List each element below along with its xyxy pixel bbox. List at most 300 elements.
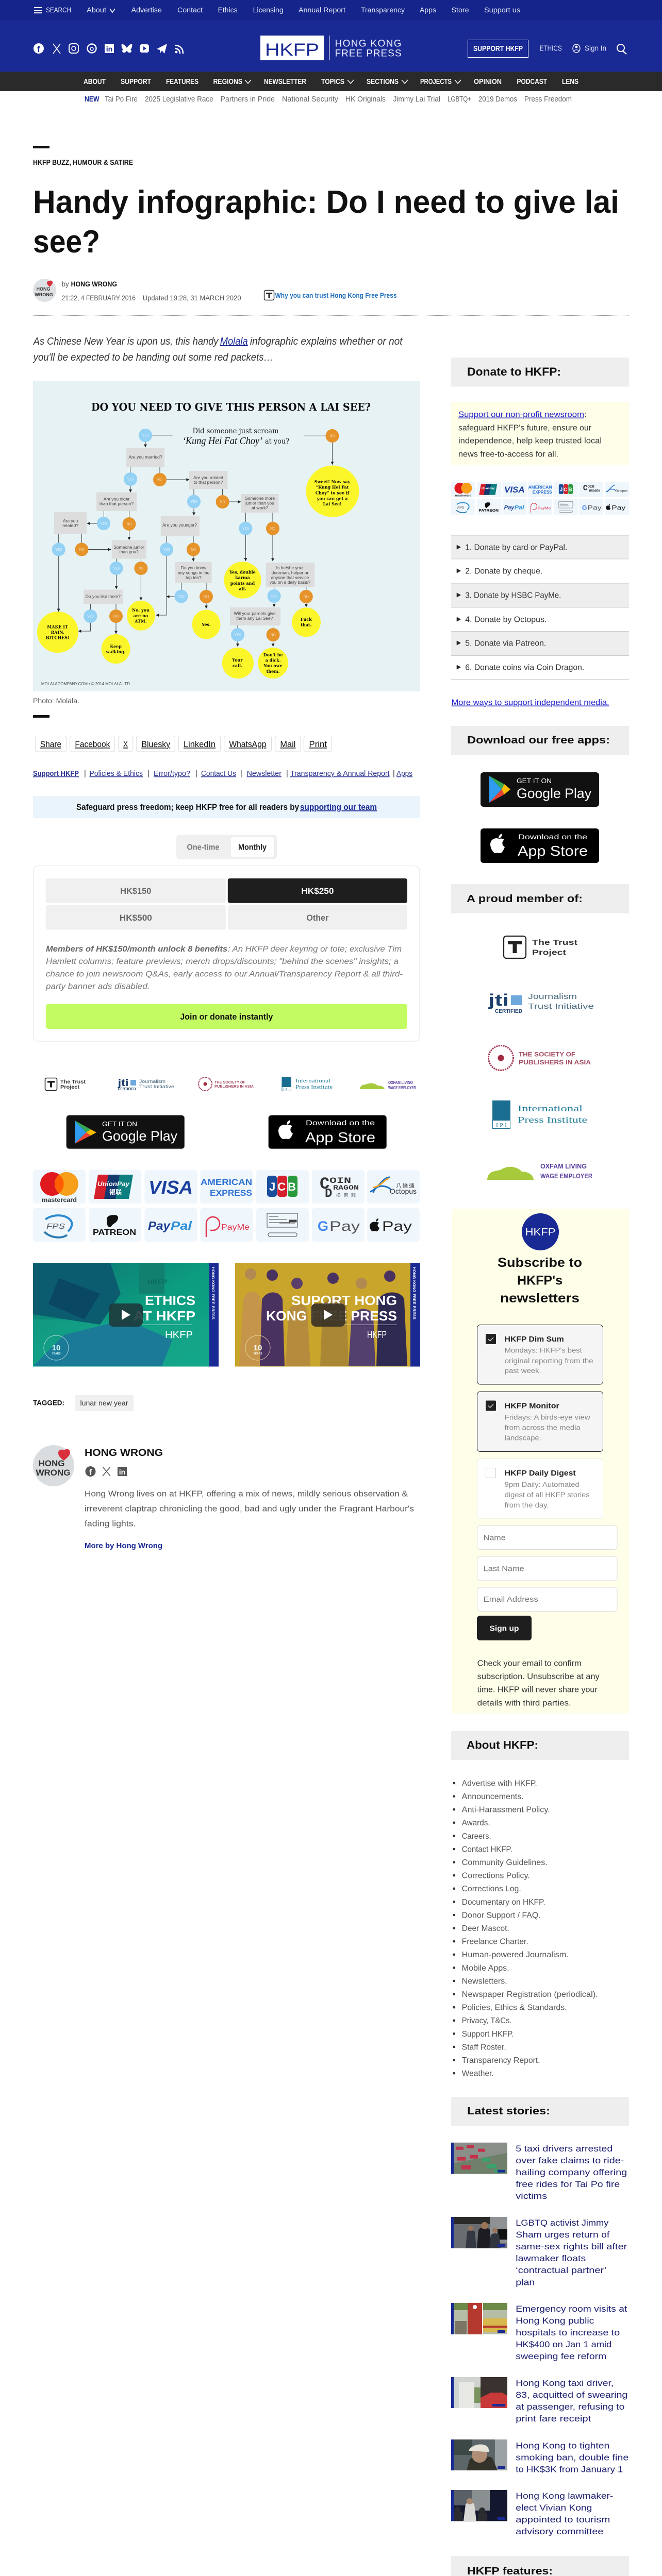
fps bbox=[44, 1215, 72, 1238]
one-time monthly toggle bbox=[176, 835, 277, 859]
american express bbox=[201, 1177, 252, 1198]
logo: jti bbox=[488, 991, 594, 1014]
amount options bbox=[46, 878, 407, 929]
yes and no nodes: YES bbox=[234, 633, 241, 637]
question boxes: than you? bbox=[119, 549, 139, 554]
patreon bbox=[93, 1215, 136, 1237]
yellow answer bubbles: BITCHES! bbox=[46, 635, 70, 640]
option: monitor: HKFP Monitor bbox=[505, 1402, 559, 1411]
story 4: at passenger, refusing to bbox=[516, 2402, 624, 2412]
question boxes: Is he/she your bbox=[276, 565, 304, 570]
signup note: Check your email to confirm bbox=[477, 1659, 582, 1668]
tags: TAGGED: bbox=[33, 1398, 64, 1406]
small payment grid: OIN bbox=[588, 485, 594, 489]
question boxes: related? bbox=[62, 523, 78, 528]
main navigation: SUPPORT bbox=[121, 78, 151, 86]
video: ethics at hkfp: AT HKFP bbox=[134, 1308, 195, 1324]
story 1: free rides for Tai Po fire bbox=[516, 2179, 620, 2189]
top utility bar: Transparency bbox=[361, 6, 405, 14]
story 2: Sham urges return of bbox=[516, 2230, 610, 2240]
logo: trust project: The Trust bbox=[532, 938, 577, 947]
policy links: Error/typo? bbox=[154, 770, 190, 778]
author box: irreverent claptrap chronicling the good, bad and ugly under the Fragrant Harbour's bbox=[85, 1504, 414, 1514]
trending links: Press Freedom bbox=[524, 95, 572, 104]
opening question bbox=[183, 427, 289, 447]
top utility bar: Store bbox=[452, 6, 469, 14]
icon: search bbox=[617, 44, 626, 54]
payment methods grid bbox=[33, 1170, 420, 1242]
icon: hamburger menu bbox=[34, 8, 42, 13]
trending links: 2019 Demos bbox=[478, 95, 517, 104]
yellow answer bubbles: No, you bbox=[132, 607, 150, 613]
video: ethics at hkfp: HONG KONG FREE PRESS bbox=[211, 1267, 216, 1319]
trending links: National Security bbox=[282, 95, 339, 104]
share buttons: Mail bbox=[280, 740, 295, 749]
main navigation: PROJECTS bbox=[420, 78, 452, 86]
about links list: Anti-Harassment Policy. bbox=[462, 1806, 550, 1815]
app store badge: Download on the bbox=[306, 1119, 375, 1127]
yellow answer bubbles: ATM. bbox=[134, 619, 147, 624]
story 4: 83, acquitted of swearing bbox=[516, 2390, 627, 2400]
trending links: HK Originals bbox=[345, 95, 386, 104]
about links list: Donor Support / FAQ. bbox=[462, 1911, 541, 1920]
story 6: appointed to tourism bbox=[516, 2515, 610, 2524]
about links list: Contact HKFP. bbox=[462, 1845, 512, 1854]
trending links: 2025 Legislative Race bbox=[145, 95, 213, 104]
about links list: Corrections Log. bbox=[462, 1885, 521, 1893]
logo: society of publishers in asia: THE SOCIETY OF bbox=[214, 1080, 245, 1084]
author social icons bbox=[86, 1466, 127, 1477]
about links list: Human-powered Journalism. bbox=[462, 1951, 569, 1959]
option: daily digest bbox=[477, 1459, 603, 1518]
logo: trust project bbox=[504, 936, 577, 958]
logo: jti: Journalism bbox=[528, 992, 577, 1001]
connector arrows bbox=[59, 435, 332, 647]
question boxes: Are you bbox=[63, 518, 78, 523]
small payment grid: Pay bbox=[504, 504, 515, 511]
option: daily digest: digest of all HKFP stories bbox=[505, 1491, 590, 1499]
signup heading: newsletters bbox=[500, 1291, 580, 1306]
logo: jti: CERTIFIED bbox=[495, 1008, 522, 1014]
policy links: Contact Us bbox=[201, 770, 236, 778]
sidebar: latest stories: Latest stories: bbox=[467, 2106, 550, 2117]
trending links: LGBTQ+ bbox=[448, 95, 471, 104]
policy links: Policies & Ethics bbox=[90, 770, 143, 778]
yes and no nodes: YES bbox=[100, 521, 107, 526]
small payment grid: AMERICAN bbox=[528, 485, 552, 489]
about links list: Advertise with HKFP. bbox=[462, 1780, 537, 1788]
question boxes: them any Lai See? bbox=[237, 616, 273, 621]
question boxes: Do you like them? bbox=[86, 594, 121, 599]
about links list: Awards. bbox=[462, 1819, 490, 1827]
policy links: Newsletter bbox=[247, 770, 282, 778]
author avatar: HONG bbox=[36, 286, 51, 292]
masthead: ETHICS bbox=[540, 44, 562, 53]
about links list: Corrections Policy. bbox=[462, 1872, 530, 1880]
about links list: Policies, Ethics & Standards. bbox=[462, 2004, 567, 2012]
signup heading: Subscribe to bbox=[498, 1256, 582, 1270]
sidebar: download apps: Download our free apps: bbox=[467, 735, 610, 746]
logo: international press institute bbox=[282, 1077, 333, 1091]
share buttons: X bbox=[123, 740, 128, 749]
top utility bar: Annual Report bbox=[299, 6, 345, 14]
social icons: f bbox=[37, 44, 40, 54]
yellow answer bubbles: all. bbox=[239, 586, 246, 591]
small payment grid: VISA bbox=[504, 485, 525, 495]
yes and no nodes: YES bbox=[142, 434, 149, 438]
visa: VISA bbox=[148, 1177, 193, 1198]
logo: society of publishers in asia bbox=[489, 1046, 591, 1071]
yellow answer bubbles: Yes, double bbox=[229, 570, 256, 575]
cheque bbox=[267, 1213, 297, 1236]
intro paragraph: infographic explains whether or not bbox=[250, 336, 403, 347]
story 2: LGBTQ activist Jimmy bbox=[516, 2218, 609, 2228]
sign up button: Sign up bbox=[490, 1624, 519, 1633]
logo: international press institute: I·P·I bbox=[496, 1122, 507, 1128]
story 4: Hong Kong taxi driver, bbox=[516, 2378, 614, 2388]
paypal: Pay bbox=[148, 1219, 171, 1232]
google pay: Pay bbox=[329, 1218, 360, 1234]
logo: jti: Trust Initiative bbox=[139, 1084, 174, 1090]
video: support hong kong free press: SUPORT HONG bbox=[291, 1293, 397, 1308]
option: dim sum: HKFP Dim Sum bbox=[505, 1335, 564, 1344]
story 4 bbox=[451, 2377, 627, 2424]
yes and no nodes: NO bbox=[79, 548, 85, 552]
masthead bbox=[0, 20, 662, 72]
logo: jti: jti bbox=[488, 991, 509, 1009]
trust project link: Why you can trust Hong Kong Free Press bbox=[275, 291, 397, 299]
press freedom banner: supporting our team bbox=[300, 803, 377, 812]
small payment grid: JCB bbox=[560, 487, 572, 493]
payme bbox=[206, 1217, 250, 1237]
main navigation: FEATURES bbox=[166, 78, 198, 86]
about links list: Deer Mascot. bbox=[462, 1924, 509, 1933]
about links list: Announcements. bbox=[462, 1792, 524, 1801]
trending links: Tai Po Fire bbox=[105, 95, 138, 104]
google play badge small bbox=[481, 772, 599, 807]
signup note: time. HKFP will never share your bbox=[477, 1686, 598, 1694]
question boxes: to that person? bbox=[194, 480, 223, 485]
top utility bar: Support us bbox=[484, 6, 520, 14]
member benefits: Hamlett columns; feature previews; merch drops/discounts; "behind the scenes" insights; a bbox=[46, 957, 399, 966]
question boxes bbox=[54, 448, 315, 625]
yellow answer bubbles: points and bbox=[230, 581, 255, 586]
top utility bar: Licensing bbox=[253, 6, 284, 14]
video: support hong kong free press: HONG KONG FREE PRESS bbox=[412, 1267, 417, 1319]
story 5: Hong Kong to tighten bbox=[516, 2441, 609, 2451]
sidebar: download apps bbox=[451, 726, 629, 863]
yes and no nodes: YES bbox=[113, 567, 120, 571]
question boxes: Are you younger? bbox=[162, 522, 197, 528]
donate accordion: 1. Donate by card or PayPal. bbox=[465, 543, 567, 552]
story 1: 5 taxi drivers arrested bbox=[516, 2144, 613, 2154]
story 3: sweeping fee reform bbox=[516, 2351, 606, 2361]
small payment grid: mastercard bbox=[455, 495, 471, 498]
coin dragon: C bbox=[320, 1175, 329, 1194]
policy links: | bbox=[147, 770, 150, 778]
question boxes: doorman, helper or bbox=[271, 570, 308, 575]
main navigation bbox=[0, 72, 662, 91]
policy links: Support HKFP bbox=[33, 770, 79, 778]
main navigation: LENS bbox=[562, 78, 578, 86]
small payment grid: PayMe bbox=[538, 505, 551, 510]
yellow answer bubbles: “Kung Hei Fat bbox=[316, 485, 349, 490]
logo: trust project bbox=[45, 1078, 86, 1090]
story 3: HK$400 on Jan 1 amid bbox=[516, 2340, 611, 2349]
yes and no nodes: YES bbox=[55, 548, 62, 552]
signup note: subscription. Unsubscribe at any bbox=[477, 1672, 600, 1681]
payment tiles bbox=[33, 1170, 420, 1242]
yellow answer bubbles: karma bbox=[235, 575, 250, 580]
yellow answer bubbles: Don't be bbox=[263, 652, 283, 657]
donate accordion: 3. Donate by HSBC PayMe. bbox=[465, 591, 561, 600]
photo caption: Photo: Molala. bbox=[33, 697, 79, 705]
option: dim sum bbox=[477, 1325, 603, 1384]
video: support hong kong free press: KONG FREE PRESS bbox=[266, 1308, 397, 1324]
small payment grid: UnionPay bbox=[482, 487, 495, 490]
author photo: HONG bbox=[38, 1459, 65, 1468]
infographic flowchart bbox=[33, 381, 420, 691]
patreon: PATREON bbox=[93, 1228, 136, 1237]
small payment grid: PATREON bbox=[478, 508, 499, 513]
membership logos row bbox=[45, 1077, 416, 1091]
about links list: Community Guidelines. bbox=[462, 1858, 548, 1867]
HKFP logo: HKFP bbox=[265, 40, 319, 60]
top utility bar: About bbox=[87, 6, 106, 14]
flowchart title: DO YOU NEED TO GIVE THIS PERSON A LAI SEE? bbox=[91, 401, 371, 413]
question boxes: Will your parents give bbox=[234, 611, 276, 616]
about links list: Mobile Apps. bbox=[462, 1964, 509, 1973]
author box: HONG WRONG bbox=[85, 1448, 163, 1459]
yes and no nodes: NO bbox=[270, 527, 275, 531]
member benefits: party banner ads disabled. bbox=[45, 982, 150, 991]
story 1: hailing company offering bbox=[516, 2167, 627, 2177]
yes and no nodes: NO bbox=[126, 522, 132, 527]
yes and no nodes: YES bbox=[271, 595, 277, 599]
video: support hong kong free press: HKFP bbox=[367, 1330, 387, 1341]
octopus: Octopus bbox=[390, 1187, 417, 1195]
yes and no nodes: NO bbox=[157, 478, 162, 482]
story 5 bbox=[451, 2439, 628, 2475]
HKFP logo bbox=[260, 36, 401, 60]
video: ethics at hkfp: HKFP bbox=[147, 1278, 167, 1286]
byline: Updated 19:28, 31 MARCH 2020 bbox=[143, 294, 241, 302]
policy links: | bbox=[195, 770, 197, 778]
title bbox=[33, 184, 619, 260]
yes and no nodes: NO bbox=[113, 614, 119, 618]
yes and no nodes: YES bbox=[242, 527, 249, 531]
small payment grid: C bbox=[583, 485, 588, 493]
amount options: Other bbox=[306, 913, 329, 923]
yes and no nodes: YES bbox=[178, 595, 185, 599]
author box: fading lights. bbox=[85, 1520, 136, 1528]
share buttons: Share bbox=[40, 740, 61, 749]
byline: by bbox=[62, 280, 69, 288]
trust project link bbox=[264, 291, 397, 300]
yellow answer bubbles: them. bbox=[267, 669, 280, 674]
member benefits: Members of HK$150/month unlock 8 benefits bbox=[46, 945, 227, 954]
top utility bar bbox=[0, 0, 662, 20]
option: dim sum: original reporting from the bbox=[505, 1357, 593, 1365]
main navigation: SECTIONS bbox=[367, 78, 399, 86]
main navigation: ABOUT bbox=[84, 78, 106, 86]
yellow answer bubbles: Sweet! Now say bbox=[315, 479, 351, 484]
trending links bbox=[85, 95, 572, 104]
donate accordion: 2. Donate by cheque. bbox=[465, 567, 542, 576]
apple pay bbox=[370, 1218, 412, 1234]
logo: oxfam living wage bbox=[360, 1080, 416, 1090]
option: daily digest: HKFP Daily Digest bbox=[505, 1469, 576, 1478]
HKFP round logo bbox=[522, 1213, 559, 1250]
logo: international press institute: Press Institute bbox=[518, 1115, 587, 1125]
yellow answer bubbles: Fuck bbox=[301, 617, 312, 622]
yes and no nodes: YES bbox=[190, 500, 197, 504]
author box: Hong Wrong lives on at HKFP, offering a mix of news, mildly serious observation & bbox=[85, 1490, 408, 1498]
donate accordion: 5. Donate via Patreon. bbox=[465, 639, 546, 648]
story 2 bbox=[451, 2217, 627, 2287]
about links list: Staff Roster. bbox=[462, 2043, 506, 2052]
small payment grid: FPS bbox=[457, 506, 465, 510]
input fields bbox=[477, 1526, 617, 1612]
jcb bbox=[267, 1176, 297, 1197]
logo: oxfam living wage: OXFAM LIVING bbox=[388, 1080, 413, 1085]
logo: international press institute: International bbox=[518, 1104, 583, 1113]
logo: international press institute: International bbox=[295, 1078, 330, 1084]
icon: sign in bbox=[573, 44, 580, 53]
sidebar: about bbox=[451, 1731, 629, 2078]
opening question: Did someone just scream bbox=[193, 427, 278, 435]
question boxes: Someone more bbox=[245, 496, 275, 501]
yellow answer bubbles: are no bbox=[134, 613, 148, 618]
story 3 bbox=[451, 2303, 627, 2361]
yellow answer bubbles: walking. bbox=[106, 649, 126, 654]
google play badge: Google Play bbox=[102, 1128, 177, 1144]
story 3: Hong Kong public bbox=[516, 2316, 594, 2326]
sidebar: donate: More ways to support independent media. bbox=[452, 699, 609, 707]
google pay bbox=[318, 1218, 360, 1234]
donate note bbox=[451, 402, 629, 465]
yes and no nodes: NO bbox=[220, 500, 225, 504]
social icons bbox=[34, 43, 183, 54]
donate note: news free-to-access for all. bbox=[458, 450, 558, 459]
signup heading: HKFP's bbox=[517, 1274, 562, 1288]
question boxes: Someone junior bbox=[113, 545, 144, 550]
amount options: HK$150 bbox=[120, 886, 151, 896]
sidebar: proud member: A proud member of: bbox=[467, 893, 583, 905]
jcb: JCB bbox=[269, 1180, 296, 1193]
share buttons: Facebook bbox=[75, 740, 110, 749]
unionpay: 银联 bbox=[109, 1188, 122, 1196]
question boxes: any songs in the bbox=[177, 570, 210, 575]
video: ethics at hkfp: YEARS bbox=[52, 1352, 61, 1355]
author social icons: f bbox=[89, 1468, 92, 1477]
small payment grid: Pay bbox=[588, 504, 602, 511]
video: ethics at hkfp bbox=[33, 1263, 219, 1366]
app store badge small: Download on the bbox=[518, 833, 587, 841]
yellow answer bubbles: Your bbox=[231, 657, 243, 663]
coin dragon: 換幣龍 bbox=[336, 1192, 356, 1198]
payme: PayMe bbox=[221, 1223, 250, 1232]
input fields: Last Name bbox=[484, 1564, 524, 1573]
author box bbox=[33, 1445, 414, 1550]
top utility bar: Ethics bbox=[218, 6, 238, 14]
paypal bbox=[148, 1219, 192, 1232]
story 5: to HK$3K from January 1 bbox=[516, 2465, 623, 2475]
yes and no nodes: YES bbox=[87, 614, 94, 618]
about links list: Freelance Charter. bbox=[462, 1938, 528, 1946]
yes and no nodes bbox=[52, 429, 339, 641]
sidebar: about: About HKFP: bbox=[467, 1738, 538, 1752]
option: monitor: Fridays: A birds-eye view bbox=[505, 1414, 590, 1421]
donation card bbox=[33, 866, 420, 1041]
question boxes: Are you older bbox=[104, 497, 129, 502]
logo: society of publishers in asia: PUBLISHERS IN ASIA bbox=[214, 1084, 254, 1089]
yellow answer bubbles: You owe bbox=[263, 663, 283, 668]
question boxes: junior than you bbox=[245, 501, 274, 506]
story 1 bbox=[451, 2143, 627, 2201]
main navigation: TOPICS bbox=[321, 78, 344, 86]
option: monitor: landscape. bbox=[505, 1434, 541, 1442]
yellow answer bubbles: Keep bbox=[110, 643, 122, 649]
sidebar: proud member bbox=[451, 884, 629, 1180]
trending links: Partners in Pride bbox=[221, 95, 275, 104]
video: ethics at hkfp: ETHICS bbox=[145, 1293, 195, 1308]
small payment grid: Pay bbox=[611, 504, 626, 511]
amount options: HK$250 bbox=[301, 886, 334, 896]
join button bbox=[46, 1004, 407, 1029]
option: monitor: from across the media bbox=[505, 1424, 581, 1431]
story 6: advisory committee bbox=[516, 2527, 603, 2536]
question boxes: at work? bbox=[252, 505, 268, 510]
intro paragraph: Molala bbox=[220, 336, 248, 347]
google play badge small: Google Play bbox=[517, 786, 591, 801]
about links list: Support HKFP. bbox=[462, 2030, 514, 2039]
author box: More by Hong Wrong bbox=[85, 1542, 162, 1550]
donate note: Support our non-profit newsroom bbox=[458, 410, 584, 419]
logo: oxfam living wage: OXFAM LIVING bbox=[540, 1162, 587, 1170]
member benefits bbox=[45, 945, 403, 991]
small payment grid: DRAGON bbox=[589, 489, 601, 493]
press freedom banner: Safeguard press freedom; keep HKFP free for all readers by bbox=[76, 803, 300, 812]
yes and no nodes: YES bbox=[163, 548, 170, 552]
american express: AMERICAN bbox=[201, 1177, 252, 1187]
about links list: Transparency Report. bbox=[462, 2056, 540, 2065]
app store badge: App Store bbox=[305, 1129, 375, 1145]
question boxes: Are you related bbox=[193, 475, 223, 480]
story 6: Hong Kong lawmaker- bbox=[516, 2491, 613, 2501]
logo: jti: Journalism bbox=[139, 1079, 166, 1084]
question boxes: than that person? bbox=[100, 501, 134, 506]
donate note: safeguard HKFP's future, ensure our bbox=[458, 423, 592, 433]
question boxes: Do you know bbox=[181, 565, 207, 570]
author photo bbox=[33, 1445, 74, 1486]
policy links: | bbox=[84, 770, 86, 778]
HKFP round logo: HKFP bbox=[525, 1227, 556, 1238]
about links list: Documentary on HKFP. bbox=[462, 1898, 545, 1907]
main navigation: NEWSLETTER bbox=[264, 78, 306, 86]
coin dragon: OIN bbox=[329, 1176, 351, 1185]
member benefits: chance to join newsroom Q&As, early access to our Annual/Transparency Report & all third- bbox=[46, 970, 403, 979]
masthead: Sign In bbox=[585, 44, 606, 53]
story 2: ‘contractual partner’ bbox=[516, 2265, 606, 2275]
option: daily digest: from the day. bbox=[505, 1501, 549, 1509]
question boxes: anyone that service bbox=[271, 575, 309, 580]
question boxes: Are you married? bbox=[128, 454, 162, 460]
sidebar: hkfp features bbox=[451, 2556, 629, 2576]
support button: SUPPORT HKFP bbox=[473, 45, 523, 53]
intro paragraph: you'll be expected to be handing out some red packets… bbox=[32, 352, 273, 363]
unionpay bbox=[94, 1175, 133, 1199]
